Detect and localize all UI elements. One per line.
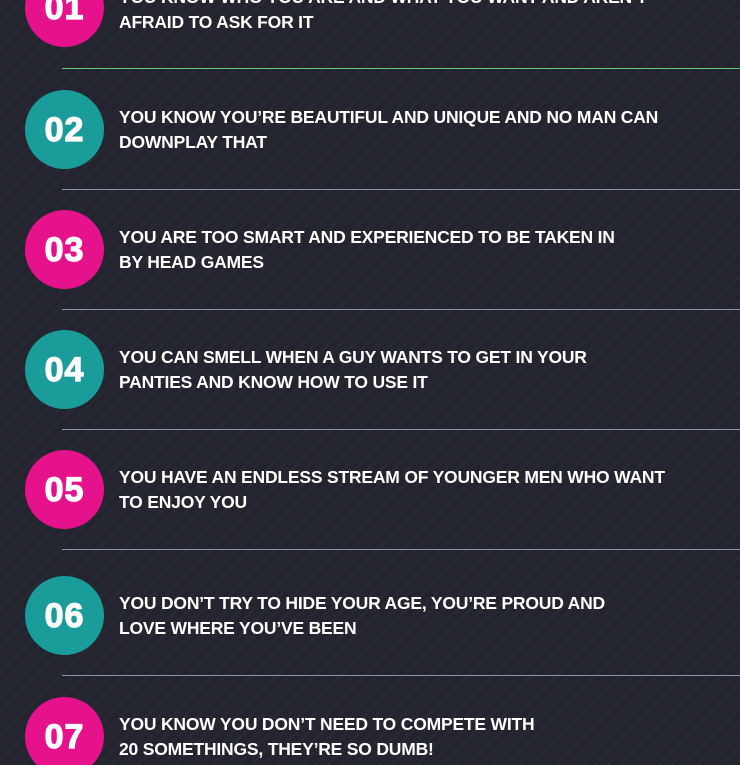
circle 04: 04 xyxy=(45,351,84,389)
circle 03 xyxy=(25,210,104,289)
circle 04 xyxy=(25,330,104,409)
text 05 xyxy=(119,467,665,512)
text 03: BY HEAD GAMES xyxy=(119,252,264,272)
item 06 xyxy=(25,576,605,655)
circle 03: 03 xyxy=(45,231,84,269)
text 06: LOVE WHERE YOU’VE BEEN xyxy=(119,618,356,638)
circle 05: 05 xyxy=(45,471,84,509)
text 04 xyxy=(119,347,587,392)
text 06 xyxy=(119,593,605,638)
item 02 xyxy=(25,90,658,169)
text 01: AFRAID TO ASK FOR IT xyxy=(119,12,313,32)
text 03: YOU ARE TOO SMART AND EXPERIENCED TO BE TAKEN IN xyxy=(119,227,615,247)
item 01 xyxy=(25,0,647,47)
text 03 xyxy=(119,227,615,272)
text 01 xyxy=(119,0,647,32)
circle 02: 02 xyxy=(45,111,84,149)
text 02: YOU KNOW YOU’RE BEAUTIFUL AND UNIQUE AND NO MAN CAN xyxy=(119,107,658,127)
item 04 xyxy=(25,330,587,409)
text 07: 20 SOMETHINGS, THEY’RE SO DUMB! xyxy=(119,739,434,759)
circle 06: 06 xyxy=(45,597,84,635)
text 07: YOU KNOW YOU DON’T NEED TO COMPETE WITH xyxy=(119,714,534,734)
text 07 xyxy=(119,714,534,759)
item 03 xyxy=(25,210,615,289)
text 04: YOU CAN SMELL WHEN A GUY WANTS TO GET IN YOUR xyxy=(119,347,587,367)
item 07 xyxy=(25,697,534,765)
text 06: YOU DON’T TRY TO HIDE YOUR AGE, YOU’RE PROUD AND xyxy=(119,593,605,613)
item 05 xyxy=(25,450,665,529)
text 02: DOWNPLAY THAT xyxy=(119,132,267,152)
text 05: TO ENJOY YOU xyxy=(119,492,247,512)
circle 01 xyxy=(25,0,104,47)
circle 02 xyxy=(25,90,104,169)
text 02 xyxy=(119,107,658,152)
circle 07: 07 xyxy=(45,718,84,756)
circle 05 xyxy=(25,450,104,529)
circle 07 xyxy=(25,697,104,765)
text 04: PANTIES AND KNOW HOW TO USE IT xyxy=(119,372,428,392)
text 05: YOU HAVE AN ENDLESS STREAM OF YOUNGER MEN WHO WANT xyxy=(119,467,665,487)
circle 06 xyxy=(25,576,104,655)
